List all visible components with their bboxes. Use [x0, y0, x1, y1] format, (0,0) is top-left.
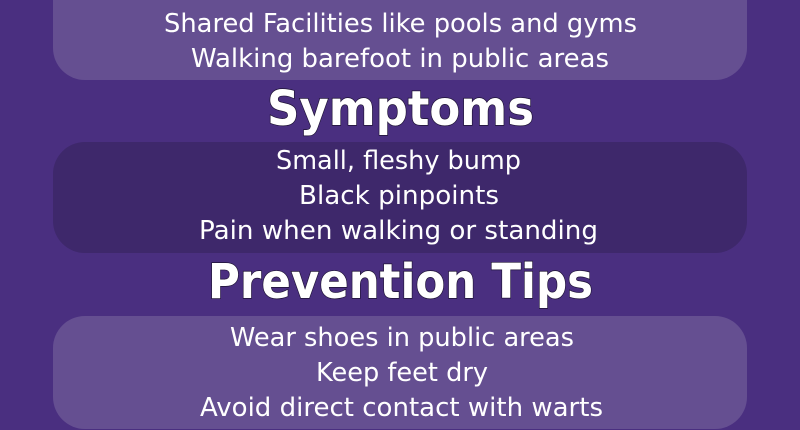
panel: prevention tips [53, 316, 747, 429]
text: pain: Pain when walking or standing [199, 216, 598, 246]
panel: symptoms [53, 142, 747, 253]
heading: symptoms: Symptoms [267, 81, 534, 137]
text: fleshy bump: Small, fleshy bump [276, 146, 521, 176]
text: walking barefoot: Walking barefoot in public areas [191, 44, 609, 74]
text: avoid contact: Avoid direct contact with warts [200, 393, 603, 423]
panel background [53, 142, 747, 253]
panel: transmission (cropped) [53, 0, 747, 80]
panel background [53, 316, 747, 429]
text: wear shoes: Wear shoes in public areas [230, 323, 574, 353]
panel background [53, 0, 747, 80]
text: black pinpoints: Black pinpoints [299, 181, 499, 211]
text: keep feet dry: Keep feet dry [316, 358, 488, 388]
heading: prevention tips: Prevention Tips [208, 254, 593, 310]
text: shared facilities: Shared Facilities like pools and gyms [164, 9, 637, 39]
